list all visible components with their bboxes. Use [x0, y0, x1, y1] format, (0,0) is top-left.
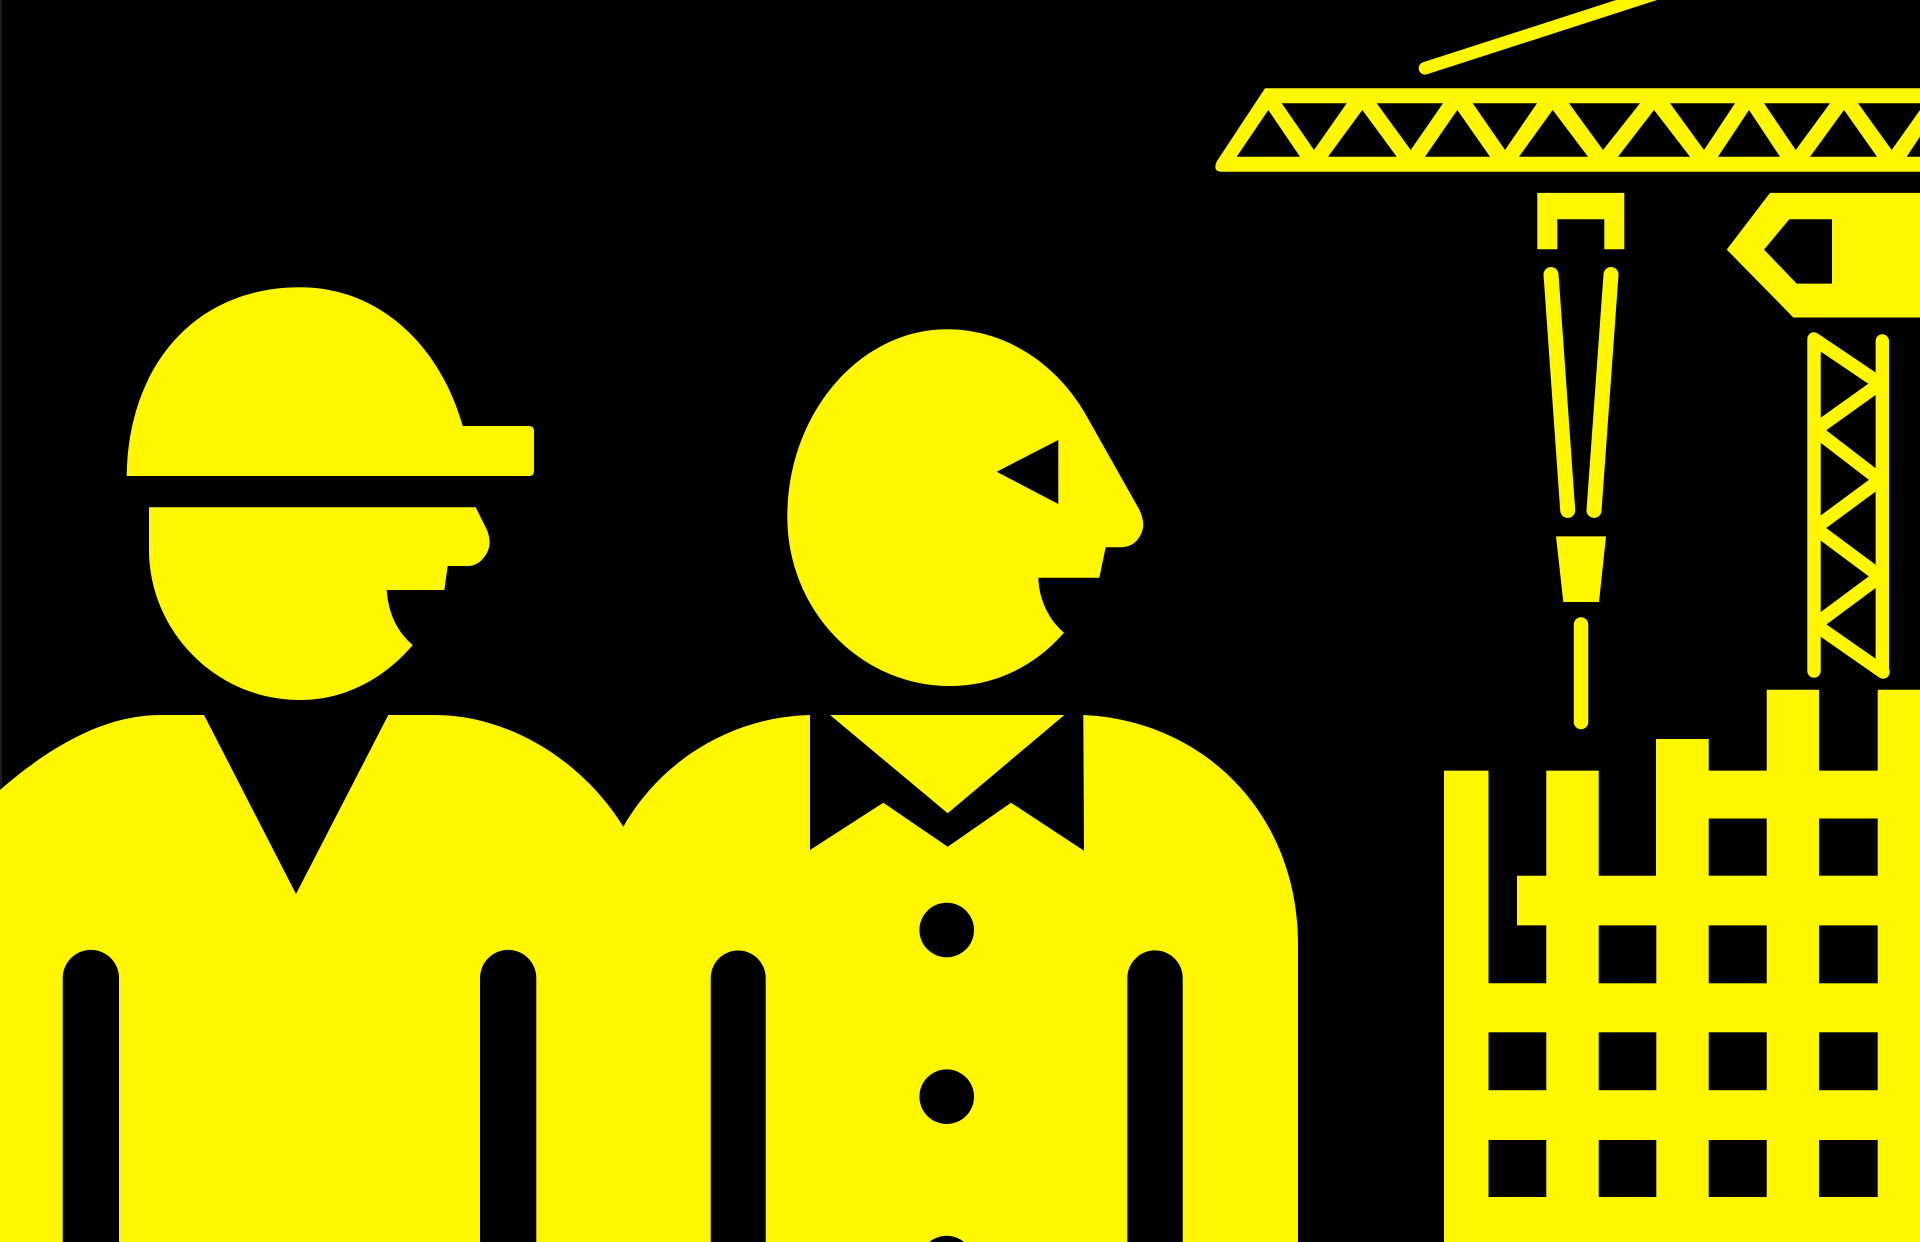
- bodies of the two figures: [0, 715, 1298, 1242]
- icon: hard hat: [127, 287, 534, 476]
- crane jib truss: [1215, 88, 1920, 172]
- engineer head: [787, 329, 1143, 686]
- people group: [0, 287, 1298, 1242]
- building silhouette: [1444, 690, 1920, 1242]
- arm gaps: [63, 950, 1183, 1242]
- shirt buttons: [919, 903, 974, 1242]
- building under construction: [1444, 690, 1920, 1242]
- worker face: [149, 507, 490, 700]
- hook block: [1556, 536, 1606, 602]
- counterweight and cab: [1727, 193, 1920, 318]
- crane: [1215, 0, 1920, 722]
- hook rod: [1574, 624, 1588, 722]
- engineer eye: [997, 440, 1058, 504]
- building windows: [1488, 818, 1878, 1197]
- hook trolley: [1537, 193, 1624, 249]
- hoist cables: [1551, 274, 1611, 510]
- crane cable: [1419, 0, 1657, 75]
- crane tower: [1814, 339, 1883, 672]
- engineer collar: [830, 715, 1064, 813]
